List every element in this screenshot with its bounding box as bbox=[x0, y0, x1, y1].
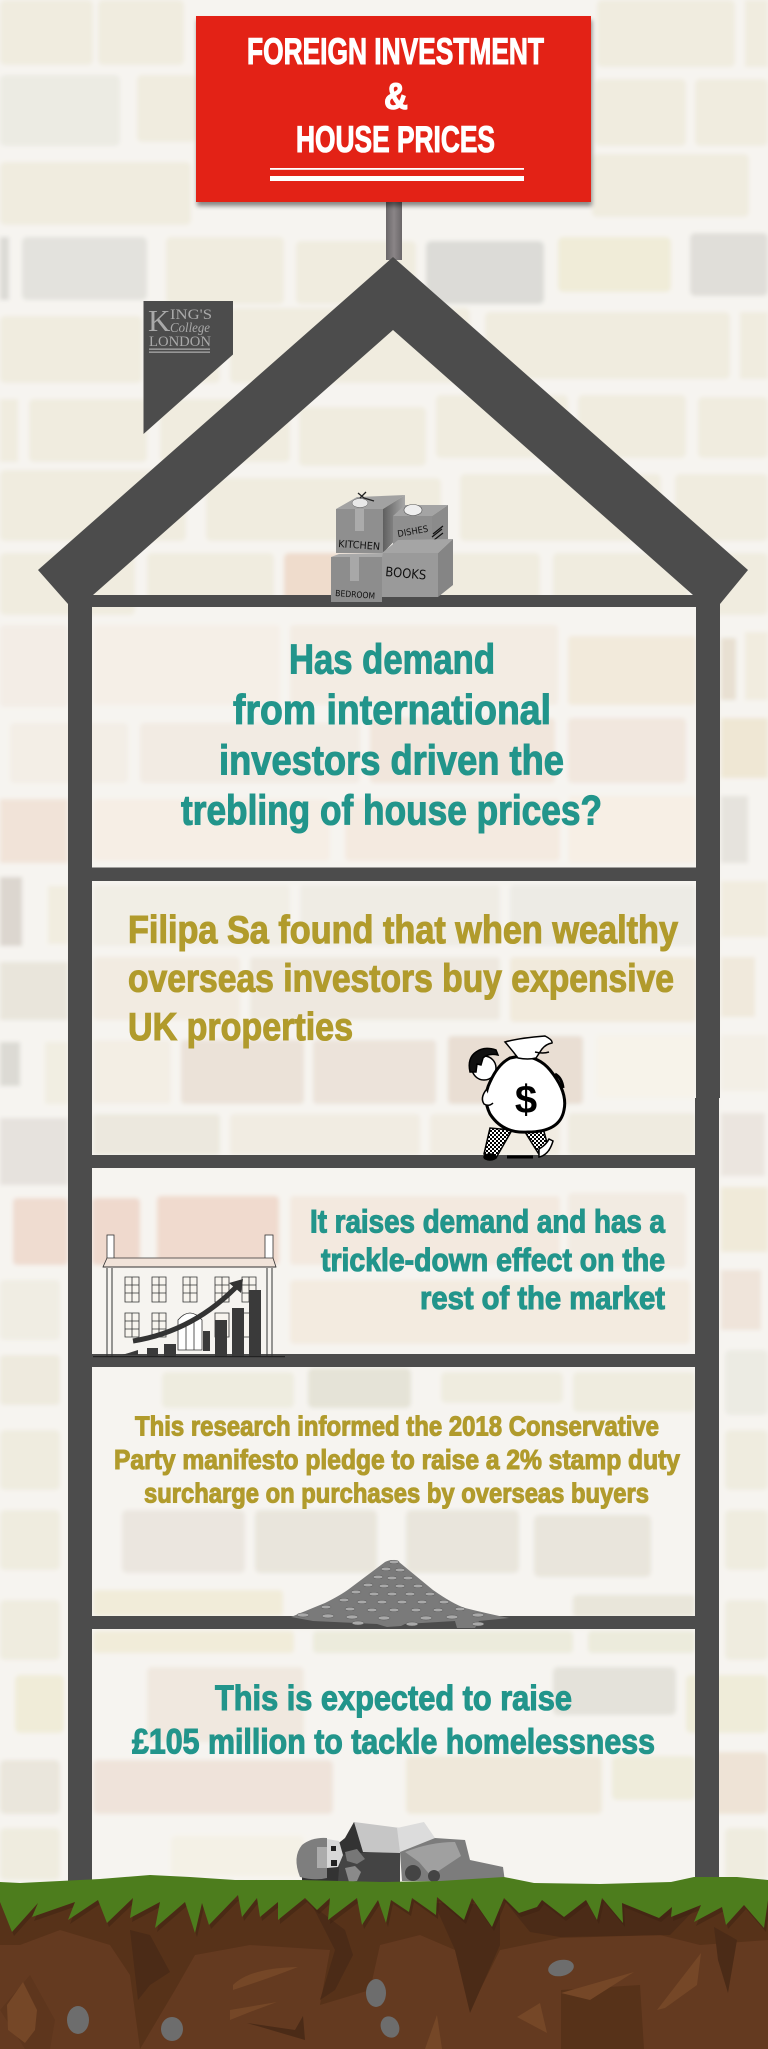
panel: question: from international bbox=[233, 686, 551, 733]
panel: homelessness: This is expected to raise bbox=[215, 1679, 572, 1718]
head bbox=[296, 1838, 327, 1879]
icon: person sleeping rough bbox=[296, 1822, 505, 1882]
panel: Filipa Sa finding bbox=[128, 909, 678, 1049]
darker soil areas bbox=[0, 1900, 768, 2049]
cardboard bbox=[354, 1822, 400, 1853]
books box: BOOKS bbox=[385, 565, 427, 584]
panel: Filipa Sa finding: UK properties bbox=[128, 1006, 353, 1049]
King's College London logo: ING'S bbox=[170, 307, 212, 323]
title text: FOREIGN INVESTMENT bbox=[247, 31, 544, 72]
stones bbox=[67, 1957, 575, 2041]
panel: manifesto pledge: This research informed the 2018 Conservative bbox=[135, 1410, 659, 1442]
King's College London logo: LONDON bbox=[149, 334, 212, 350]
panel: question: investors driven the bbox=[219, 736, 564, 784]
panel: question: Has demand bbox=[289, 636, 495, 682]
title sign bbox=[196, 16, 591, 202]
kitchen box: KITCHEN bbox=[338, 539, 380, 553]
legs bbox=[400, 1838, 505, 1882]
icon: pile of coins bbox=[291, 1560, 509, 1628]
panel: Filipa Sa finding: overseas investors buy expensive bbox=[128, 958, 674, 1000]
dishes box: DISHES bbox=[397, 525, 429, 540]
panel: trickle-down: trickle-down effect on the bbox=[321, 1242, 665, 1278]
icon: house with rising bar chart bbox=[93, 1235, 285, 1357]
dollar sign: $ bbox=[515, 1078, 537, 1122]
panel: question bbox=[181, 636, 602, 834]
walls bbox=[68, 600, 720, 1885]
panel: trickle-down bbox=[310, 1204, 665, 1316]
icon: man carrying money bag bbox=[469, 1036, 565, 1160]
chimney with logo bbox=[144, 301, 233, 434]
bag bbox=[486, 1056, 565, 1132]
legs bbox=[484, 1128, 512, 1158]
panel: homelessness bbox=[132, 1679, 655, 1762]
panel: trickle-down: It raises demand and has a bbox=[310, 1204, 665, 1240]
King's College London logo: K bbox=[148, 303, 171, 338]
ground: soil and stones bbox=[0, 1895, 768, 2049]
head bbox=[472, 1056, 496, 1080]
title text bbox=[247, 31, 544, 181]
sign post bbox=[386, 200, 402, 260]
panel: Filipa Sa finding: Filipa Sa found that when wealthy bbox=[128, 909, 678, 952]
King's College London logo bbox=[148, 303, 212, 353]
title text: & bbox=[384, 76, 408, 117]
body bbox=[302, 1822, 400, 1882]
panel: question: trebling of house prices? bbox=[181, 786, 602, 834]
panel: manifesto pledge bbox=[114, 1410, 680, 1508]
bedroom box: BEDROOM bbox=[335, 589, 375, 602]
panel: manifesto pledge: surcharge on purchases by overseas buyers bbox=[144, 1478, 649, 1508]
panel: trickle-down: rest of the market bbox=[420, 1280, 665, 1316]
roof bbox=[38, 257, 748, 640]
King's College London logo: College bbox=[170, 321, 210, 336]
panel: homelessness: £105 million to tackle homelessness bbox=[132, 1722, 655, 1762]
ground: grass bbox=[0, 1875, 768, 1937]
house frame bbox=[38, 200, 748, 1885]
panel: manifesto pledge: Party manifesto pledge to raise a 2% stamp duty bbox=[114, 1444, 680, 1475]
floor bars bbox=[92, 868, 696, 1629]
icon: moving boxes bbox=[331, 492, 453, 602]
title text: HOUSE PRICES bbox=[296, 119, 495, 160]
